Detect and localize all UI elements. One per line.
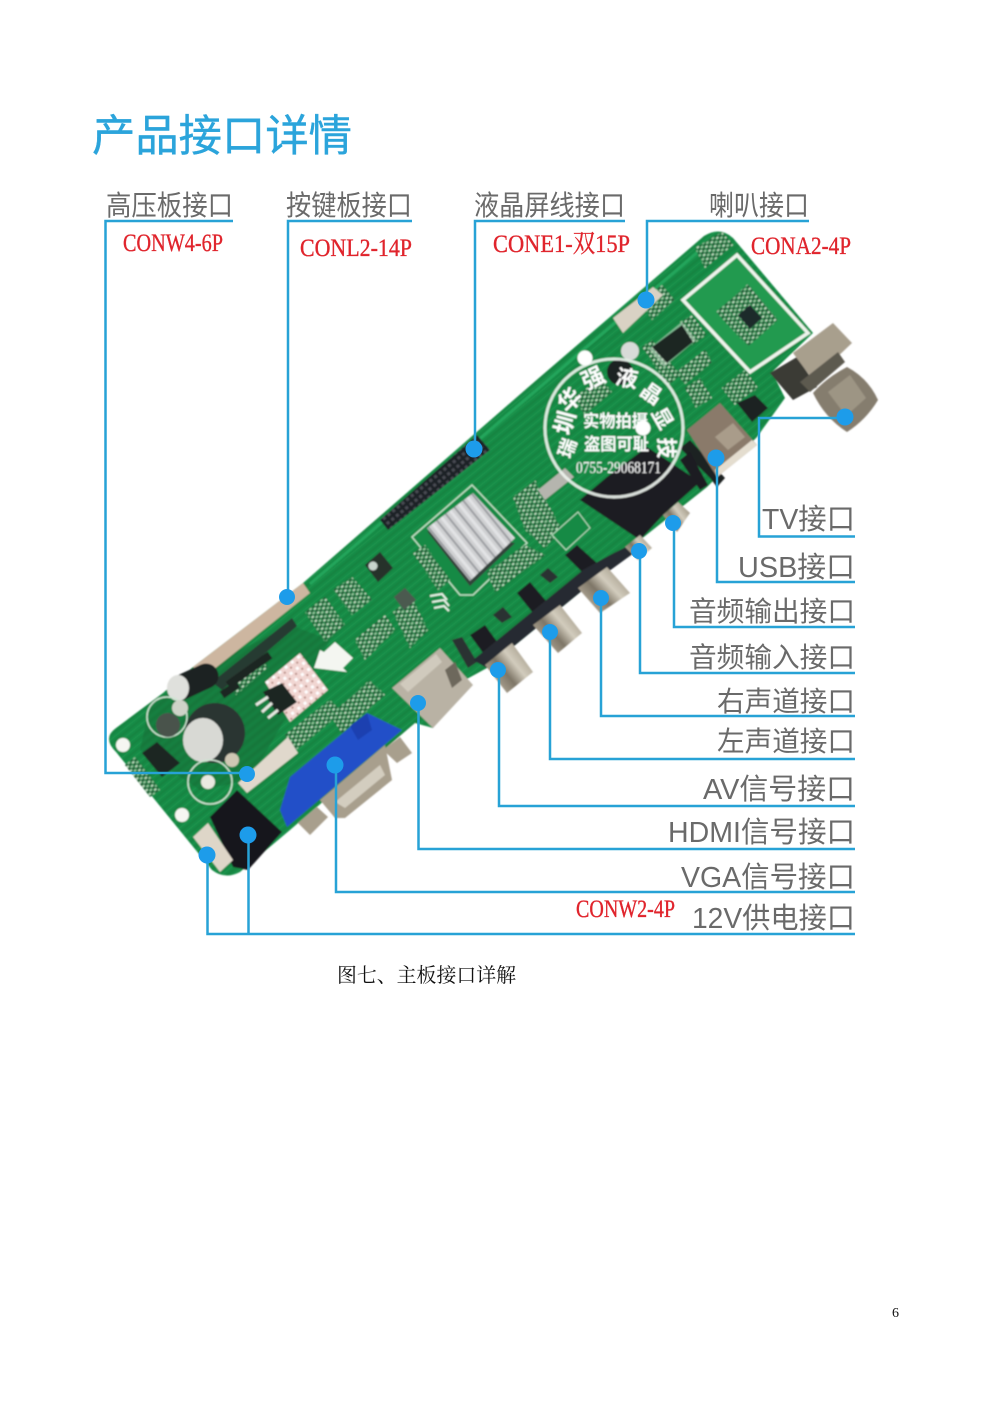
jack mounting band	[473, 540, 645, 668]
callout: key board	[279, 190, 412, 605]
callout: key board: CONL2-14P	[300, 235, 412, 262]
dark shading around capacitors	[140, 625, 330, 790]
callout: 12v power: CONW2-4P	[576, 896, 675, 923]
3-pad group	[552, 512, 590, 550]
smd parts clusters	[125, 232, 758, 797]
trimmer part	[394, 588, 416, 610]
heat sink	[427, 493, 515, 586]
callout: vga: VGA信号接口	[681, 861, 855, 894]
callout: high voltage board: CONW4-6P	[123, 230, 223, 257]
small capacitor	[607, 342, 639, 385]
LCD pin header	[380, 435, 490, 530]
callout: audio in: 音频输入接口	[689, 642, 855, 673]
callout: lcd cable: CONE1-双15P	[493, 231, 630, 258]
callout: speaker	[638, 190, 851, 308]
callout: 12v power: 12V供电接口	[692, 902, 855, 935]
callout: lcd cable: 液晶屏线接口	[474, 190, 625, 221]
callout: av	[490, 662, 855, 806]
watermark stamp: 晶	[636, 379, 666, 410]
shield frame module	[683, 255, 808, 372]
module chip	[738, 305, 762, 329]
callout: usb	[708, 450, 855, 584]
watermark stamp: 瑞	[554, 436, 582, 461]
callout: usb: USB接口	[738, 551, 855, 584]
chevron marks	[430, 594, 449, 611]
small chip highlight	[368, 562, 378, 570]
usb port	[680, 403, 757, 487]
capacitors	[147, 675, 245, 804]
callout: key board: 按键板接口	[286, 190, 412, 221]
tv tuner	[770, 323, 878, 432]
regulator chip	[737, 395, 768, 422]
watermark stamp: 0755-29068171	[576, 458, 661, 477]
callout: left channel: 左声道接口	[717, 726, 855, 757]
page number: 6	[892, 1306, 899, 1321]
white arrow marking	[314, 642, 353, 672]
watermark stamp: 华	[553, 383, 587, 417]
6P inverter connector	[238, 737, 298, 793]
regulator with pad	[256, 653, 328, 722]
callout: audio out	[665, 515, 855, 627]
callout: tv: TV接口	[762, 503, 855, 536]
circuit board photo	[109, 231, 878, 876]
callout: speaker: 喇叭接口	[709, 190, 809, 221]
title: 产品接口详情	[92, 113, 352, 161]
dark parts near regulator	[222, 655, 270, 695]
dark connector strip beside 14P	[212, 618, 297, 690]
vga port	[280, 713, 412, 835]
figure caption: 图七、主板接口详解	[337, 964, 516, 987]
callout: left channel	[542, 624, 855, 759]
watermark stamp: 显	[646, 404, 677, 434]
callout: vga	[326, 756, 855, 894]
bright board edge	[310, 250, 700, 584]
soic chip	[649, 322, 696, 367]
power jack	[210, 790, 282, 870]
module parts	[716, 284, 778, 346]
watermark stamp: 实物拍摄	[583, 411, 648, 431]
callout: hdmi	[410, 695, 855, 849]
watermark stamp: 液	[614, 364, 640, 393]
black jack blocks	[452, 447, 708, 668]
callout: 12v power	[198, 826, 855, 935]
hdmi port	[392, 648, 473, 728]
callout: audio out: 音频输出接口	[689, 596, 855, 627]
watermark stamp: 圳	[549, 409, 581, 437]
mounting holes	[116, 738, 189, 822]
callout: audio in	[631, 543, 855, 673]
watermark stamp: 盗图可耻	[584, 435, 649, 454]
callout: hdmi: HDMI信号接口	[668, 816, 855, 849]
callout: tv	[759, 408, 855, 536]
callout: right channel: 右声道接口	[717, 686, 855, 717]
callout: high voltage board	[106, 190, 255, 782]
12V power connector	[193, 823, 233, 872]
14P key board connector	[193, 583, 310, 678]
callout: right channel	[593, 590, 855, 717]
rca jacks	[485, 502, 690, 693]
crystal	[538, 468, 574, 500]
power chip	[142, 742, 180, 777]
watermark stamp: 强	[577, 361, 609, 395]
watermark stamp	[545, 350, 683, 497]
small chip	[365, 552, 393, 582]
board substrate	[109, 231, 813, 876]
silk outline around heat sink	[412, 485, 527, 595]
callout: speaker: CONA2-4P	[751, 233, 851, 260]
watermark stamp: 技	[654, 438, 677, 458]
callout: high voltage board: 高压板接口	[106, 190, 233, 221]
callout: av: AV信号接口	[703, 773, 855, 806]
callout: lcd cable	[466, 190, 630, 458]
speaker connector	[613, 287, 663, 333]
